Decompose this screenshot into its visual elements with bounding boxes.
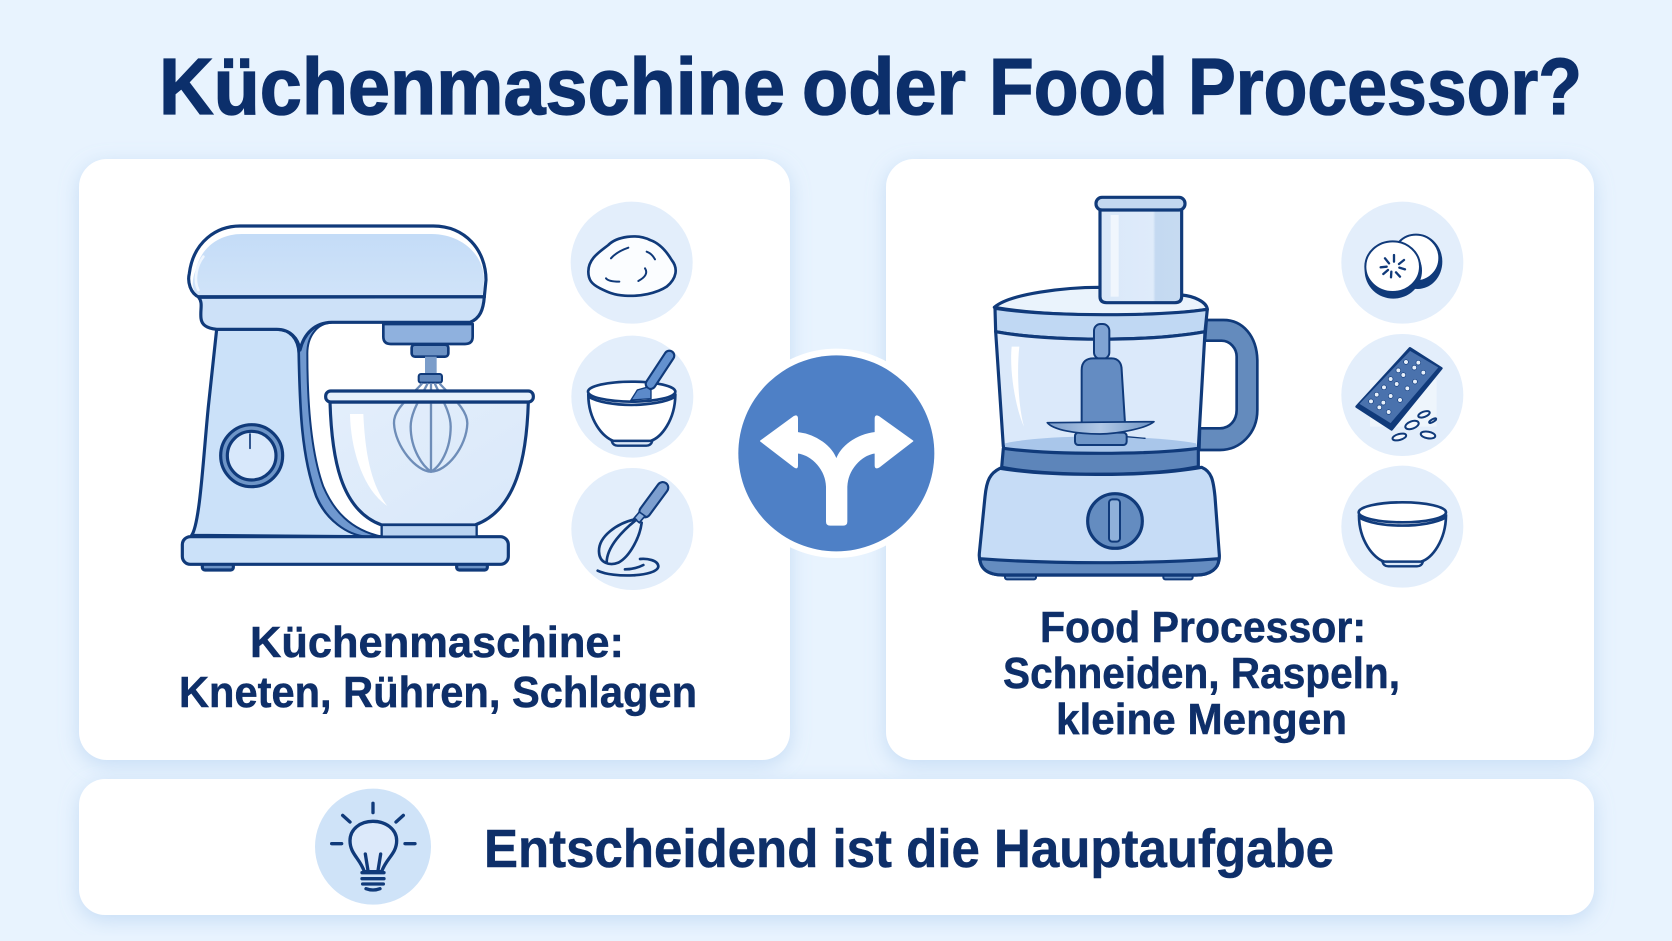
title: Küchenmaschine bbox=[159, 42, 785, 131]
icon: decision arrow circle bbox=[732, 349, 941, 558]
label: Food Processor: Schneiden, Raspeln, bbox=[1003, 649, 1400, 698]
panel: key takeaway bbox=[79, 779, 1594, 915]
label: Küchenmaschine bbox=[179, 618, 697, 717]
icon: grater bbox=[1341, 334, 1463, 456]
icon: bowl bbox=[1341, 466, 1463, 588]
icon: bowl with spoon bbox=[571, 336, 693, 458]
panel: Küchenmaschine bbox=[79, 159, 790, 760]
panel: Food Processor bbox=[886, 159, 1594, 760]
icon: whisk bbox=[571, 468, 693, 590]
icon: cucumber slices bbox=[1341, 202, 1463, 324]
icon: light bulb bbox=[315, 789, 431, 905]
title: oder bbox=[802, 42, 966, 131]
icon: stand mixer bbox=[182, 226, 533, 570]
title: Food bbox=[989, 42, 1168, 131]
label: Food Processor: kleine Mengen bbox=[1056, 695, 1347, 744]
icon: food processor bbox=[979, 197, 1257, 579]
label: Küchenmaschine: Küchenmaschine: bbox=[250, 618, 624, 667]
label: Küchenmaschine: Kneten, Rühren, Schlagen bbox=[179, 668, 697, 717]
icon: dough circle bbox=[571, 202, 693, 324]
label: Food Processor: Food Processor: bbox=[1040, 603, 1366, 652]
label: Food Processor bbox=[1003, 603, 1400, 744]
callout text: Entscheidend ist die Hauptaufgabe bbox=[484, 819, 1334, 879]
title: Processor? bbox=[1188, 42, 1582, 131]
